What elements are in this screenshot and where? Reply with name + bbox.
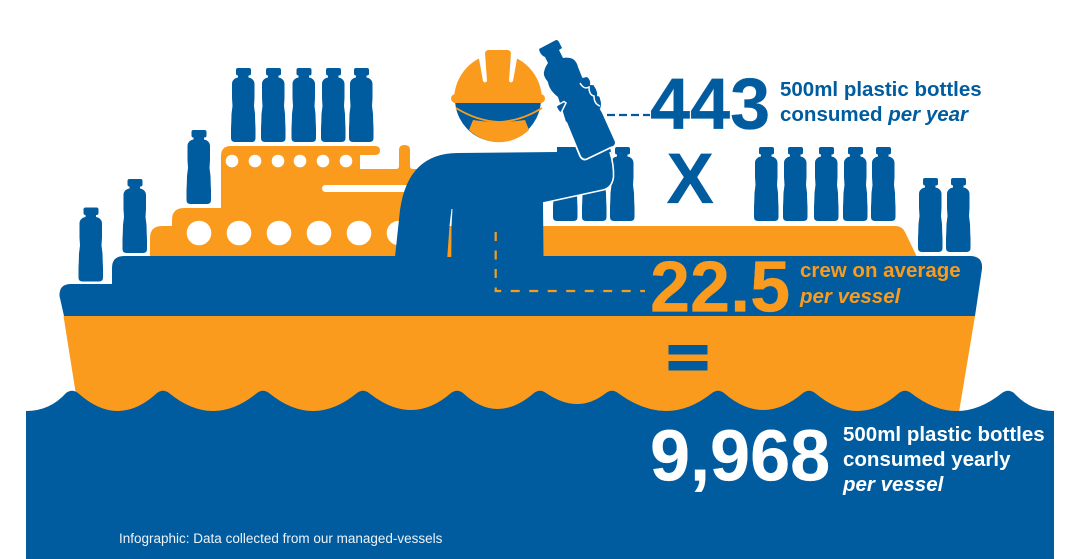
held bottle [539,40,615,160]
equals sign [668,345,708,370]
helmet ridge [485,50,511,82]
finger lines [580,83,600,106]
bottles behind the arm [553,147,634,221]
dashed connector to 443 [607,114,650,116]
worker head with hard hat and mask [451,50,545,142]
label line one: 500ml plastic bottles [780,78,982,101]
number 443: 443 [650,64,770,144]
ship lower hull [64,316,975,420]
ship superstructure [150,145,917,257]
result label line two: consumed yearly [843,448,1011,471]
bottles on deck, right [754,147,896,221]
result label line one: 500ml plastic bottles [843,423,1045,446]
number 22.5: 22.5 [650,248,790,328]
cabin stripe [322,185,422,192]
helmet grooves [478,53,518,82]
sea with waves [26,391,1054,559]
number 9,968: 9,968 [650,416,830,496]
crew label line one: crew on average [800,259,961,282]
helmet brim [451,94,545,103]
body slit [450,209,452,226]
label line two: consumed per year [780,103,969,126]
crew member figure [395,40,615,257]
fingers [580,77,601,109]
arm outline [543,152,614,203]
face mask [469,120,529,142]
multiply sign: X [666,140,714,219]
body slit lower [447,226,452,257]
body and raised arm [395,147,614,257]
dashed connector to 22.5 [496,232,645,291]
result label line three: per vessel [842,473,945,496]
helmet dome [454,54,542,103]
stat: 9,968 result [650,416,1045,496]
upper portholes [226,155,352,167]
crew label line two: per vessel [799,285,902,308]
source note: Infographic: Data collected from our managed-vessels [119,531,443,546]
ship hull band [59,256,982,316]
stat: 443 bottles per year [650,64,982,144]
bottles stepping up the bow [78,130,211,282]
face [455,103,541,142]
bottle outline [566,122,612,160]
bottles at the stern [918,178,970,252]
bottles on upper deck, left [231,68,374,142]
lower portholes [187,221,411,245]
thumb [556,102,566,113]
stat: 22.5 crew [650,248,961,328]
mask strap [456,108,542,122]
